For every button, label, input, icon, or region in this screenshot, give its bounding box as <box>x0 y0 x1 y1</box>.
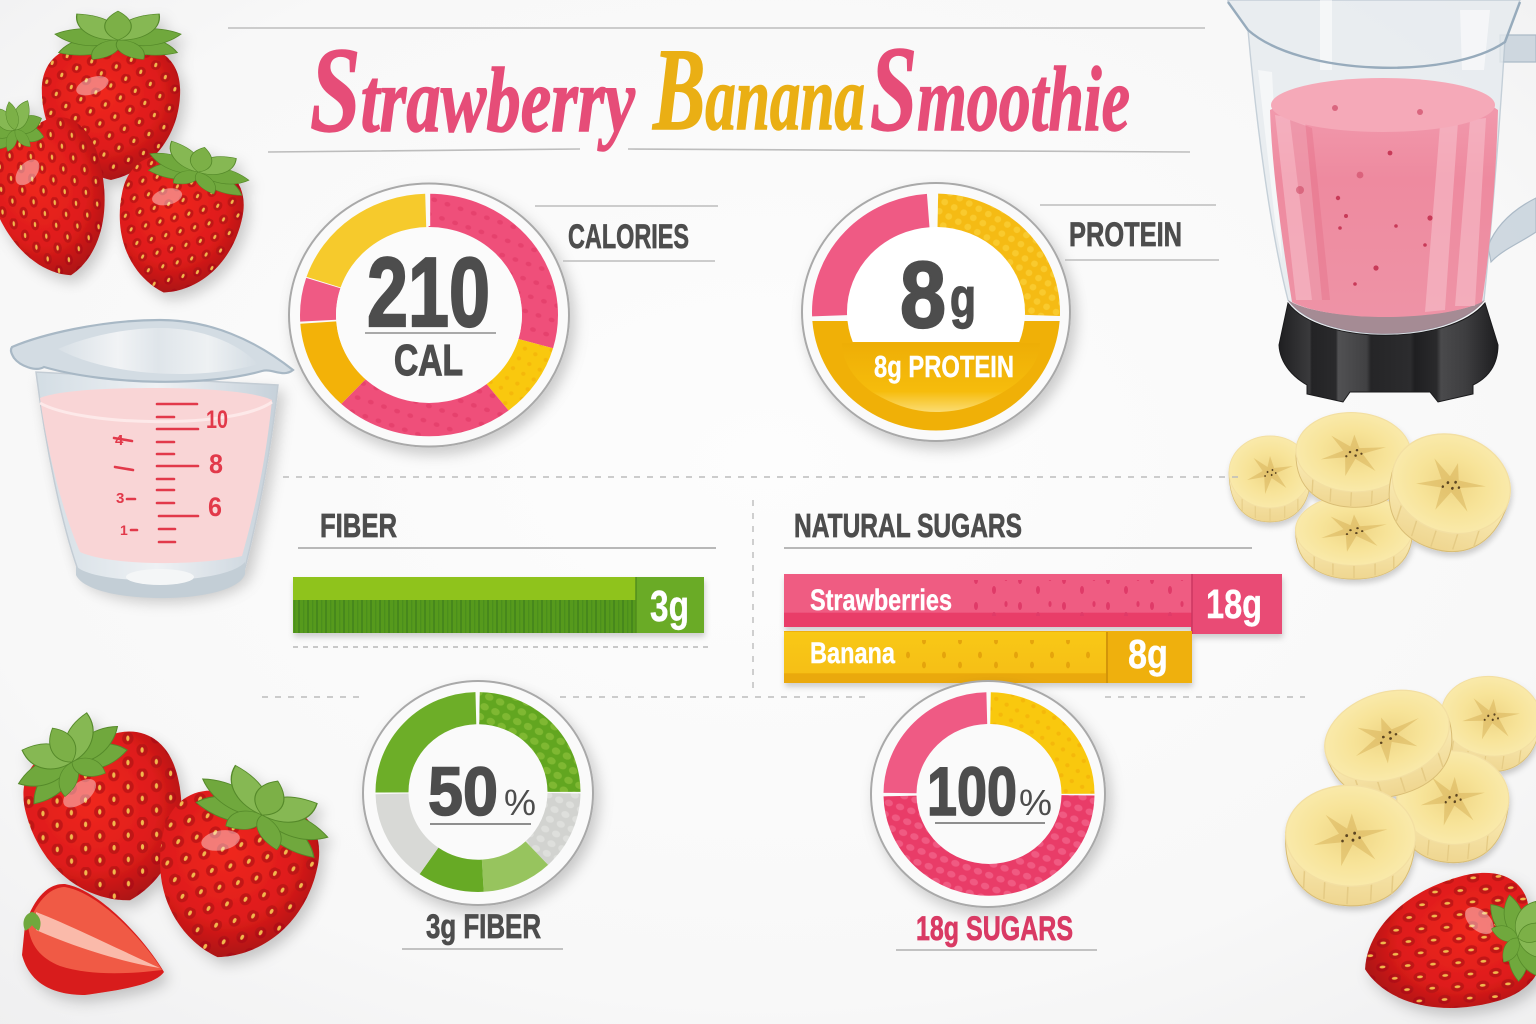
panel: protein <box>802 183 1219 441</box>
fiber bar value: 3g <box>650 582 689 631</box>
liquid stripes <box>1275 115 1486 312</box>
fiber percent caption: 3g FIBER <box>426 908 541 946</box>
cup scale ticks: 4 <box>115 432 124 449</box>
cup rim <box>11 320 293 382</box>
panel: protein: g <box>950 266 976 329</box>
sugars heading: NATURAL SUGARS <box>794 507 1022 544</box>
sugars percent value: 100 <box>927 753 1017 830</box>
banana value: 8g <box>1128 631 1168 677</box>
fiber heading: FIBER <box>320 507 397 544</box>
protein label: PROTEIN <box>1069 216 1182 254</box>
jug bottom <box>1288 300 1485 334</box>
sugars percent donut <box>871 681 1105 907</box>
cup glass body <box>36 372 278 594</box>
fiber percent value: 50 <box>428 753 498 830</box>
protein donut <box>802 183 1070 441</box>
jug highlights <box>1258 0 1490 260</box>
title word: Banana: Banana <box>652 24 865 155</box>
blender handle bottom <box>1488 198 1536 262</box>
blender liquid <box>1270 87 1498 317</box>
cup scale ticks: 1 <box>120 522 128 538</box>
blender rim <box>1228 2 1520 68</box>
banana slices upper right <box>1229 410 1523 579</box>
strawberries value: 18g <box>1206 581 1262 627</box>
protein lens <box>842 343 1040 412</box>
sugars percent caption: 18g SUGARS <box>916 910 1073 948</box>
title word: Strawberry: Strawberry <box>310 23 636 158</box>
fiber percent value: % <box>504 782 536 823</box>
calories label: CALORIES <box>568 218 689 256</box>
sugars percent value: % <box>1019 782 1052 823</box>
cup liquid <box>40 388 272 563</box>
strawberries bar <box>784 574 1282 634</box>
liquid surface <box>1271 78 1495 132</box>
panel: sugars percent <box>871 681 1105 950</box>
measuring cup <box>11 320 293 598</box>
cup scale ticks: 8 <box>209 449 223 479</box>
calories donut <box>289 184 569 446</box>
strawberries top left <box>0 9 257 305</box>
cup liquid surface <box>40 402 272 422</box>
fiber percent donut <box>363 681 593 905</box>
cup scale ticks: 3 <box>116 490 124 507</box>
calories value: 210 <box>367 237 490 347</box>
cup base <box>76 562 245 598</box>
blender base <box>1279 303 1498 402</box>
cup scale ticks <box>114 404 228 542</box>
protein value: 8 <box>900 242 946 347</box>
banana bar <box>784 631 1192 683</box>
fiber bar <box>293 577 704 633</box>
title word: Smoothie: Smoothie <box>870 22 1130 157</box>
banana label: Banana <box>810 637 895 670</box>
panel: fiber percent <box>363 681 593 949</box>
cup scale ticks: 10 <box>206 406 228 434</box>
cut strawberry <box>21 884 164 995</box>
blender jug <box>1228 0 1520 334</box>
panel: fiber <box>293 507 716 647</box>
cup inner opening <box>58 328 258 374</box>
panel: calories <box>289 184 718 446</box>
strawberries label: Strawberries <box>810 584 952 617</box>
protein inner label: 8g PROTEIN <box>874 349 1014 384</box>
title <box>310 22 1130 158</box>
strawberry bottom right <box>1348 861 1536 1024</box>
panel: natural sugars <box>784 507 1282 683</box>
cup scale ticks: 6 <box>208 492 222 522</box>
banana slices lower right <box>1282 670 1536 909</box>
calories unit: CAL <box>394 336 463 385</box>
blender <box>1228 0 1536 402</box>
blender handle top <box>1500 35 1536 62</box>
smoothie specks <box>1296 105 1433 286</box>
strawberries bottom left <box>0 695 344 995</box>
